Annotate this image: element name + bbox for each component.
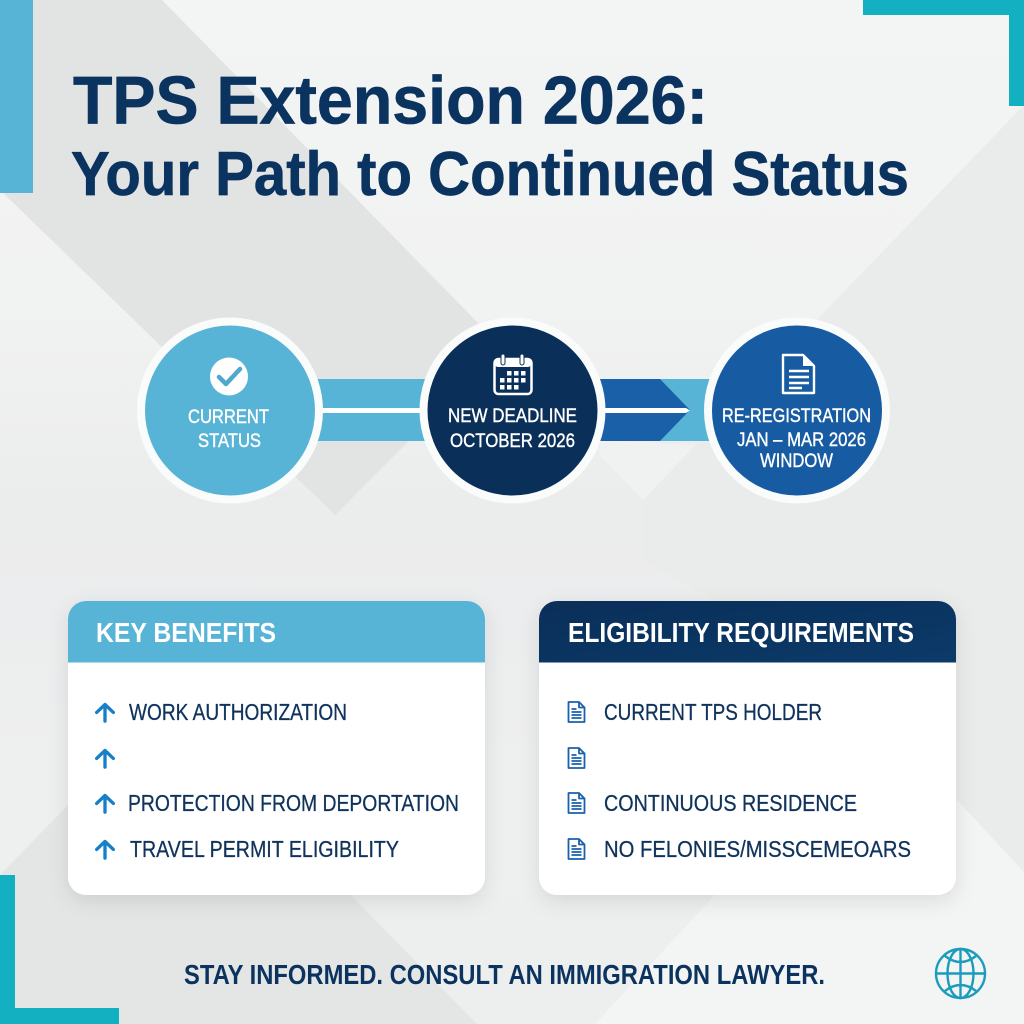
list: requirements <box>568 699 911 862</box>
step: re-registration <box>708 322 886 500</box>
panel header: eligibility requirements: ELIGIBILITY REQUIREMENTS <box>568 617 914 648</box>
label: new deadline <box>448 405 577 452</box>
label: re-registration <box>722 405 871 472</box>
connector: deadline to re-registration arrow <box>595 379 715 441</box>
icon: globe <box>936 949 985 998</box>
list: requirements: NO FELONIES/MISSCEMEOARS <box>604 836 911 862</box>
panel: key benefits <box>68 601 485 895</box>
connector: current to deadline <box>315 379 430 441</box>
list: requirements: CONTINUOUS RESIDENCE <box>604 790 857 816</box>
list: benefits: PROTECTION FROM DEPORTATION <box>128 790 459 816</box>
label: current status: CURRENT <box>188 406 269 428</box>
panel header: key benefits: KEY BENEFITS <box>96 617 276 648</box>
label: re-registration: WINDOW <box>760 450 834 472</box>
label: new deadline: NEW DEADLINE <box>448 405 577 427</box>
title: TPS Extension 2026: <box>73 62 708 138</box>
label: re-registration: JAN – MAR 2026 <box>737 429 866 451</box>
panel: eligibility requirements <box>539 601 956 895</box>
icon: check <box>210 358 248 396</box>
title <box>71 62 909 209</box>
label: current status: STATUS <box>198 430 261 452</box>
list: benefits <box>97 699 459 862</box>
icon: calendar <box>494 356 532 394</box>
label: new deadline: OCTOBER 2026 <box>450 430 575 452</box>
corner accent: top right <box>863 0 1024 106</box>
label: current status <box>188 406 269 452</box>
step: current status <box>141 322 319 500</box>
panel header: eligibility requirements <box>539 601 956 662</box>
title: Your Path to Continued Status <box>71 140 909 209</box>
icon: document <box>783 355 814 393</box>
corner accent: bottom left <box>0 875 119 1024</box>
footer call to action: STAY INFORMED. CONSULT AN IMMIGRATION LAWYER. <box>184 959 825 990</box>
panel header: key benefits <box>68 601 485 662</box>
list: requirements: CURRENT TPS HOLDER <box>604 699 822 725</box>
corner accent: top left <box>0 0 33 193</box>
step: new deadline <box>424 322 602 500</box>
timeline <box>141 322 886 500</box>
label: re-registration: RE-REGISTRATION <box>722 405 871 427</box>
list: benefits: WORK AUTHORIZATION <box>129 699 347 725</box>
list: benefits: TRAVEL PERMIT ELIGIBILITY <box>130 836 399 862</box>
